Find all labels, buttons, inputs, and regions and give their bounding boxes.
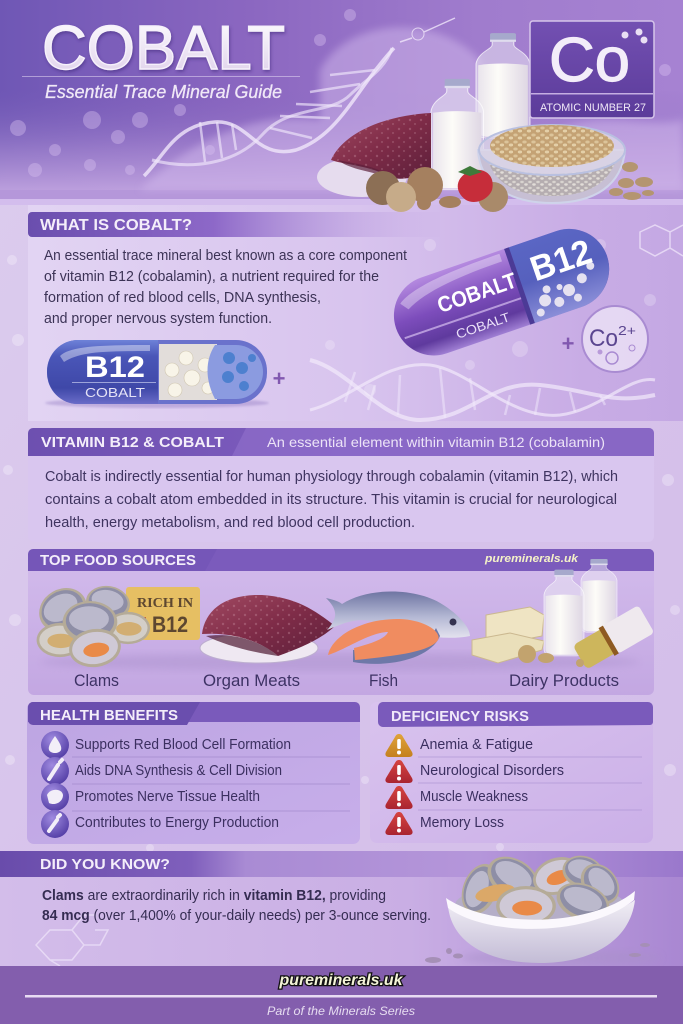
icon: liver on plate xyxy=(317,113,431,197)
panel: did you know xyxy=(0,848,683,966)
section heading bar: VITAMIN B12 & COBALT xyxy=(41,434,224,451)
series note: Part of the Minerals Series xyxy=(267,1004,415,1018)
benefit row: red blood cells: Supports Red Blood Cell Formation xyxy=(75,737,291,753)
section heading bar: An essential element within vitamin B12 (cobalamin) xyxy=(267,434,605,450)
panel: health benefits xyxy=(27,702,360,844)
benefit row: DNA synthesis xyxy=(41,757,282,785)
icon: whole fish xyxy=(326,591,470,638)
risk row: neurological: Neurological Disorders xyxy=(420,763,564,779)
benefit row: energy xyxy=(41,810,279,838)
risk row: anemia xyxy=(385,734,533,757)
hexagon pattern xyxy=(36,915,108,966)
icon: clams xyxy=(31,579,150,670)
icon: cobalt B12 capsule: B12 xyxy=(525,232,597,289)
section heading bar xyxy=(28,428,654,456)
food labels: Organ Meats xyxy=(203,671,300,690)
description text xyxy=(44,248,407,327)
icon: salmon steak xyxy=(328,619,440,664)
description text: formation of red blood cells, DNA synthesis, xyxy=(44,290,321,306)
fact text: Clams are extraordinarily rich in vitamin B12, providing xyxy=(42,888,386,904)
section heading bar: WHAT IS COBALT? xyxy=(40,217,192,234)
icon: organ meat on plate xyxy=(200,595,335,663)
food labels: Dairy Products xyxy=(509,671,619,690)
panel: what is cobalt xyxy=(28,205,683,421)
section heading bar: pureminerals.uk xyxy=(484,553,579,565)
food labels xyxy=(74,671,619,690)
icon: glass bowl of grains xyxy=(478,125,625,203)
section heading bar xyxy=(378,702,653,727)
icon: cobalt B12 capsule: COBALT xyxy=(454,309,512,342)
description text: contains a cobalt atom embedded in its structure. This vitamin is crucial for neurological xyxy=(45,492,617,508)
section heading bar: HEALTH BENEFITS xyxy=(40,707,178,724)
fact text: 84 mcg (over 1,400% of your-daily needs) per 3-ounce serving. xyxy=(42,908,431,924)
section heading bar: DID YOU KNOW? xyxy=(40,856,170,873)
DNA background xyxy=(310,225,683,420)
food labels: Clams xyxy=(74,671,119,690)
section heading bar xyxy=(0,851,683,877)
icon: rich in B12 label: B12 xyxy=(152,612,188,637)
risk row: anemia: Anemia & Fatigue xyxy=(420,737,533,753)
icon: rich in B12 label xyxy=(126,587,200,640)
panel: vitamin B12 and cobalt xyxy=(28,428,654,542)
icon: cobalt B12 capsule: COBALT xyxy=(434,267,520,318)
benefit row: red blood cells xyxy=(41,731,291,759)
header banner xyxy=(0,0,683,212)
risk row: muscle: Muscle Weakness xyxy=(420,789,528,805)
icon: milk bottle large xyxy=(476,33,530,138)
icon: B12 capsule: B12 xyxy=(85,351,145,384)
icon: milk bottle small xyxy=(431,79,484,190)
benefit row: DNA synthesis: Aids DNA Synthesis & Cell Division xyxy=(75,763,282,779)
subtitle: Essential Trace Mineral Guide xyxy=(45,82,282,102)
description text: and proper nervous system function. xyxy=(44,311,272,327)
icon: scattered seeds xyxy=(609,162,654,200)
icon: Co2+ ion: 2+ xyxy=(618,323,636,338)
section heading bar xyxy=(28,702,360,725)
background swooshes xyxy=(140,27,683,190)
icon: supplement bottle xyxy=(572,605,654,671)
icon: plus: + xyxy=(273,366,285,391)
section heading bar xyxy=(28,212,440,237)
panel: top food sources xyxy=(28,549,654,695)
fact text xyxy=(42,888,431,924)
icon: B12 capsule: COBALT xyxy=(85,385,145,400)
icon: element tile: ATOMIC NUMBER 27 xyxy=(540,102,646,114)
icon: element tile: Co xyxy=(549,26,630,95)
panel: deficiency risks xyxy=(370,702,653,843)
website link: pureminerals.uk xyxy=(278,972,404,989)
benefit row: energy: Contributes to Energy Production xyxy=(75,815,279,831)
icon: Co2+ ion: Co xyxy=(589,325,618,352)
icon: element tile xyxy=(530,21,654,118)
icon: DNA helix xyxy=(144,18,455,176)
icon: cobalt B12 capsule xyxy=(383,218,620,366)
page bokeh texture xyxy=(3,255,680,852)
footer xyxy=(0,966,683,1024)
description text: health, energy metabolism, and red blood cell production. xyxy=(45,515,415,531)
description text: An essential trace mineral best known as a core component xyxy=(44,248,407,264)
title: COBALT xyxy=(42,14,285,83)
risk row: memory xyxy=(385,812,504,835)
description text: of vitamin B12 (cobalamin), a nutrient required for the xyxy=(44,269,379,285)
icon: milk bottles xyxy=(544,559,617,656)
icon: tofu cheese blocks xyxy=(472,607,544,663)
section heading bar: DEFICIENCY RISKS xyxy=(391,708,529,725)
icon: rich in B12 label: RICH IN xyxy=(137,596,193,611)
risk row: neurological xyxy=(385,760,564,783)
icon: pebbles xyxy=(425,943,650,963)
icon: B12 capsule xyxy=(45,340,269,408)
description text: Cobalt is indirectly essential for human physiology through cobalamin (vitamin B12), which xyxy=(45,469,618,485)
description text xyxy=(45,469,618,531)
bokeh xyxy=(325,239,656,396)
food labels: Fish xyxy=(369,671,398,690)
icon: bowl of clams xyxy=(446,848,660,966)
icon: walnuts and strawberry xyxy=(366,166,508,212)
benefit row: nerve tissue xyxy=(41,783,260,811)
icon: nuts xyxy=(518,645,584,667)
risk row: memory: Memory Loss xyxy=(420,815,504,831)
section heading bar: TOP FOOD SOURCES xyxy=(40,552,196,569)
section heading bar xyxy=(28,549,654,571)
ground shadow xyxy=(40,653,640,671)
bokeh dots xyxy=(10,9,671,177)
icon: Co2+ ion xyxy=(582,306,648,372)
icon: plus: + xyxy=(562,331,574,356)
benefit row: nerve tissue: Promotes Nerve Tissue Health xyxy=(75,789,260,805)
risk row: muscle xyxy=(385,786,528,809)
